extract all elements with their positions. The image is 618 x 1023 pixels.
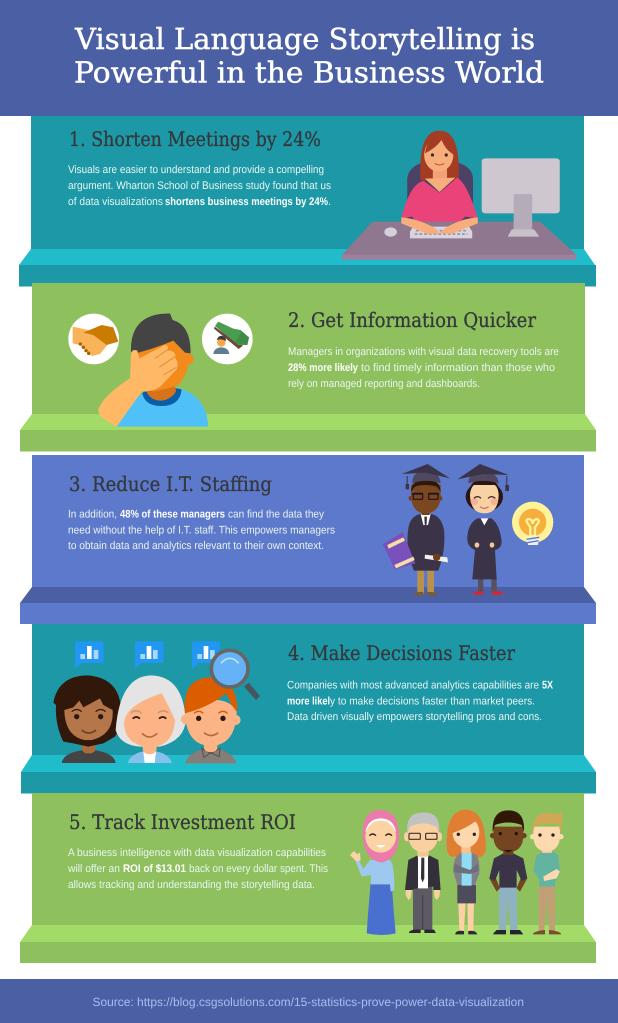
icon: person with white hair: [116, 675, 186, 763]
text block: section 1 body: argument. Wharton School of Business study found that us: [68, 180, 331, 192]
heading: section 1: 1. Shorten Meetings by 24%: [69, 127, 321, 151]
text block: section 5 body: allows tracking and understanding the storytelling data.: [68, 879, 315, 891]
text block: section 2 body: 28% more likely: [288, 362, 359, 374]
panel: section 3 reduce IT staffing: [20, 455, 596, 624]
text block: section 1 body: of data visualizations: [68, 196, 163, 208]
icon: magnifying glass: [211, 650, 260, 700]
text block: section 3 body: [68, 508, 335, 552]
text block: section 1 body: Visuals are easier to understand and provide a compelling: [68, 164, 324, 176]
text block: section 2 body: to find timely information than those who: [361, 362, 555, 374]
text block: section 4 body: more likel: [287, 696, 330, 708]
icon: woman at desk with computer: [342, 131, 576, 260]
text block: section 4 body: Data driven visually empowers storytelling pros and cons.: [287, 711, 542, 723]
icon: man with dark shirt: [489, 810, 527, 934]
panel: section 5 track investment ROI: [20, 793, 596, 963]
text block: section 5 body: [67, 847, 328, 891]
text block: section 3 body: can find the data they: [228, 508, 324, 520]
text block: section 1 body: .: [328, 196, 331, 208]
icon: blond man with green shirt: [530, 812, 564, 934]
text block: section 4 body: Companies with most advanced analytics capabilities are: [287, 680, 539, 692]
icon: person with red hair: [181, 677, 241, 763]
icon: red-haired woman in skirt: [447, 810, 486, 934]
heading: section 4: 4. Make Decisions Faster: [288, 641, 515, 665]
text block: section 3 body: 48% of these managers: [120, 508, 225, 520]
text block: section 4 body: 5X: [542, 680, 554, 692]
icon: woman in hijab waving: [350, 810, 399, 935]
text block: section 3 body: need without the help of I.T. staff. This empowers managers: [68, 524, 335, 536]
icon: handshake badge: [68, 314, 119, 364]
header banner: [0, 0, 618, 116]
icon: person with dark hair: [53, 675, 121, 763]
footer: source: Source: https://blog.csgsolutions.com/15-statistics-prove-power-data-visualization: [92, 995, 524, 1009]
text block: section 4 body: [287, 680, 554, 723]
text block: section 5 body: back on every dollar spent. This: [189, 863, 328, 875]
heading: section 2: 2. Get Information Quicker: [288, 308, 536, 332]
text block: section 2 body: [288, 346, 559, 390]
text block: section 5 body: will offer an: [67, 863, 120, 875]
panel: section 2 get information quicker: [20, 283, 596, 452]
title: Visual Language Storytelling is: [74, 22, 535, 56]
footer: source: [0, 979, 618, 1023]
icon: older man in suit: [404, 812, 442, 933]
text block: section 3 body: In addition,: [68, 508, 117, 520]
text block: section 5 body: ROI of $13.01: [123, 863, 186, 875]
panel: section 1 shorten meetings: [19, 116, 596, 286]
icon: man facepalming: [98, 313, 208, 427]
icon: chart speech bubbles: [75, 641, 220, 669]
icon: shoe over person badge: [202, 314, 253, 364]
icon: graduate woman: [457, 464, 509, 595]
icon: graduate man with book and diploma: [383, 464, 450, 595]
title: [74, 22, 544, 90]
text block: section 2 body: rely on managed reporting and dashboards.: [288, 378, 480, 390]
text block: section 3 body: to obtain data and analytics relevant to their own context.: [68, 540, 324, 552]
title: Powerful in the Business World: [74, 56, 544, 90]
icon: light bulb: [512, 502, 553, 545]
panel: section 4 make decisions faster: [21, 624, 596, 794]
text block: section 1 body: shortens business meetings by 24%: [165, 196, 328, 208]
heading: section 3: 3. Reduce I.T. Staffing: [69, 472, 272, 496]
text block: section 2 body: Managers in organizations with visual data recovery tools are: [288, 346, 559, 358]
heading: section 5: 5. Track Investment ROI: [69, 810, 296, 834]
text block: section 4 body: y to make decisions faster than market peers.: [330, 696, 535, 708]
text block: section 1 body: [68, 164, 331, 208]
text block: section 5 body: A business intelligence with data visualization capabilities: [68, 847, 326, 859]
